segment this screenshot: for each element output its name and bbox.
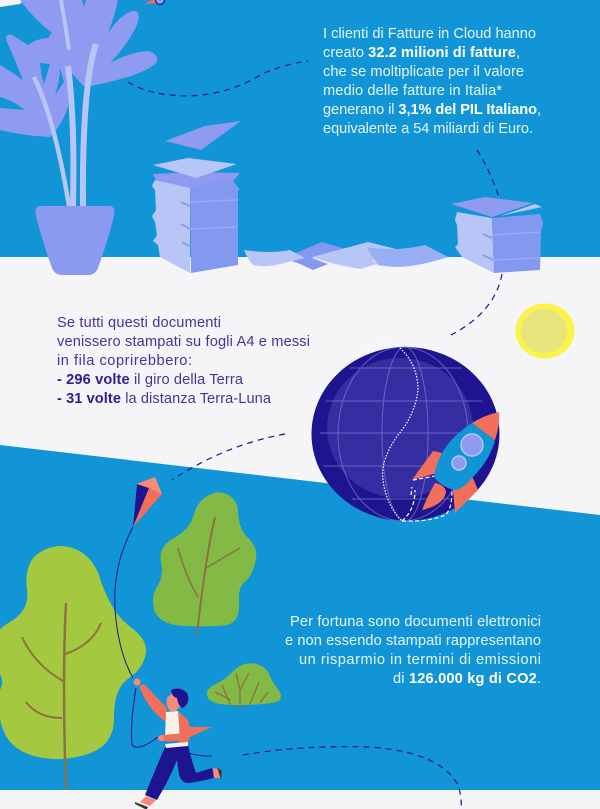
text block: distanza [57,315,310,407]
text block: risparmio: Per fortuna sono documenti elettronici [290,614,541,630]
text block: distanza: - 296 volte il giro della Terra [57,372,244,388]
icon: floating sheet [165,121,241,150]
text block: fatture: medio delle fatture in Italia* [323,83,502,99]
icon: bush [207,663,281,708]
icon: globe [312,342,500,521]
text block: distanza: venissero stampati su fogli A4 e messi [57,334,310,350]
background: lower blue band [0,445,600,790]
icon: scattered sheets [244,242,448,270]
arrow: bottom to next section [243,747,461,809]
text block: fatture: creato 32.2 milioni di fatture, [323,45,520,61]
text block: risparmio: e non essendo stampati rappresentano [285,633,541,649]
text block: fatture: che se moltiplicate per il valore [323,64,524,80]
icon: rocket [402,412,499,521]
text block: fatture: equivalente a 54 miliardi di Euro. [323,121,533,137]
icon: large tree [0,546,146,789]
arrow: text to stack [477,150,500,200]
text block: fatture [323,26,541,137]
icon: paper stack left [152,158,240,273]
icon: running person [132,678,222,809]
text block: risparmio [285,614,541,687]
text block: fatture: I clienti di Fatture in Cloud hanno [323,26,536,42]
text block: risparmio: di 126.000 kg di CO2. [393,671,541,687]
icon: medium tree [153,492,256,635]
text block: distanza: - 31 volte la distanza Terra-Luna [57,391,272,407]
text block: fatture: generano il 3,1% del PIL Italiano, [323,102,541,118]
icon: kite [115,477,162,678]
text block: risparmio: un risparmio in termini di emissioni [299,652,541,668]
icon: potted plant [0,0,157,275]
icon: kite tail fragment [116,0,164,4]
arrow: plant to text [128,61,308,96]
icon: sun [488,304,574,385]
arrow: globe to kite [172,434,285,480]
arrow: stack to globe [451,274,502,335]
text block: distanza: Se tutti questi documenti [57,315,221,331]
icon: paper stack right [451,197,543,273]
background: top blue band [0,0,600,257]
text block: distanza: in fila coprirebbero: [57,353,192,369]
